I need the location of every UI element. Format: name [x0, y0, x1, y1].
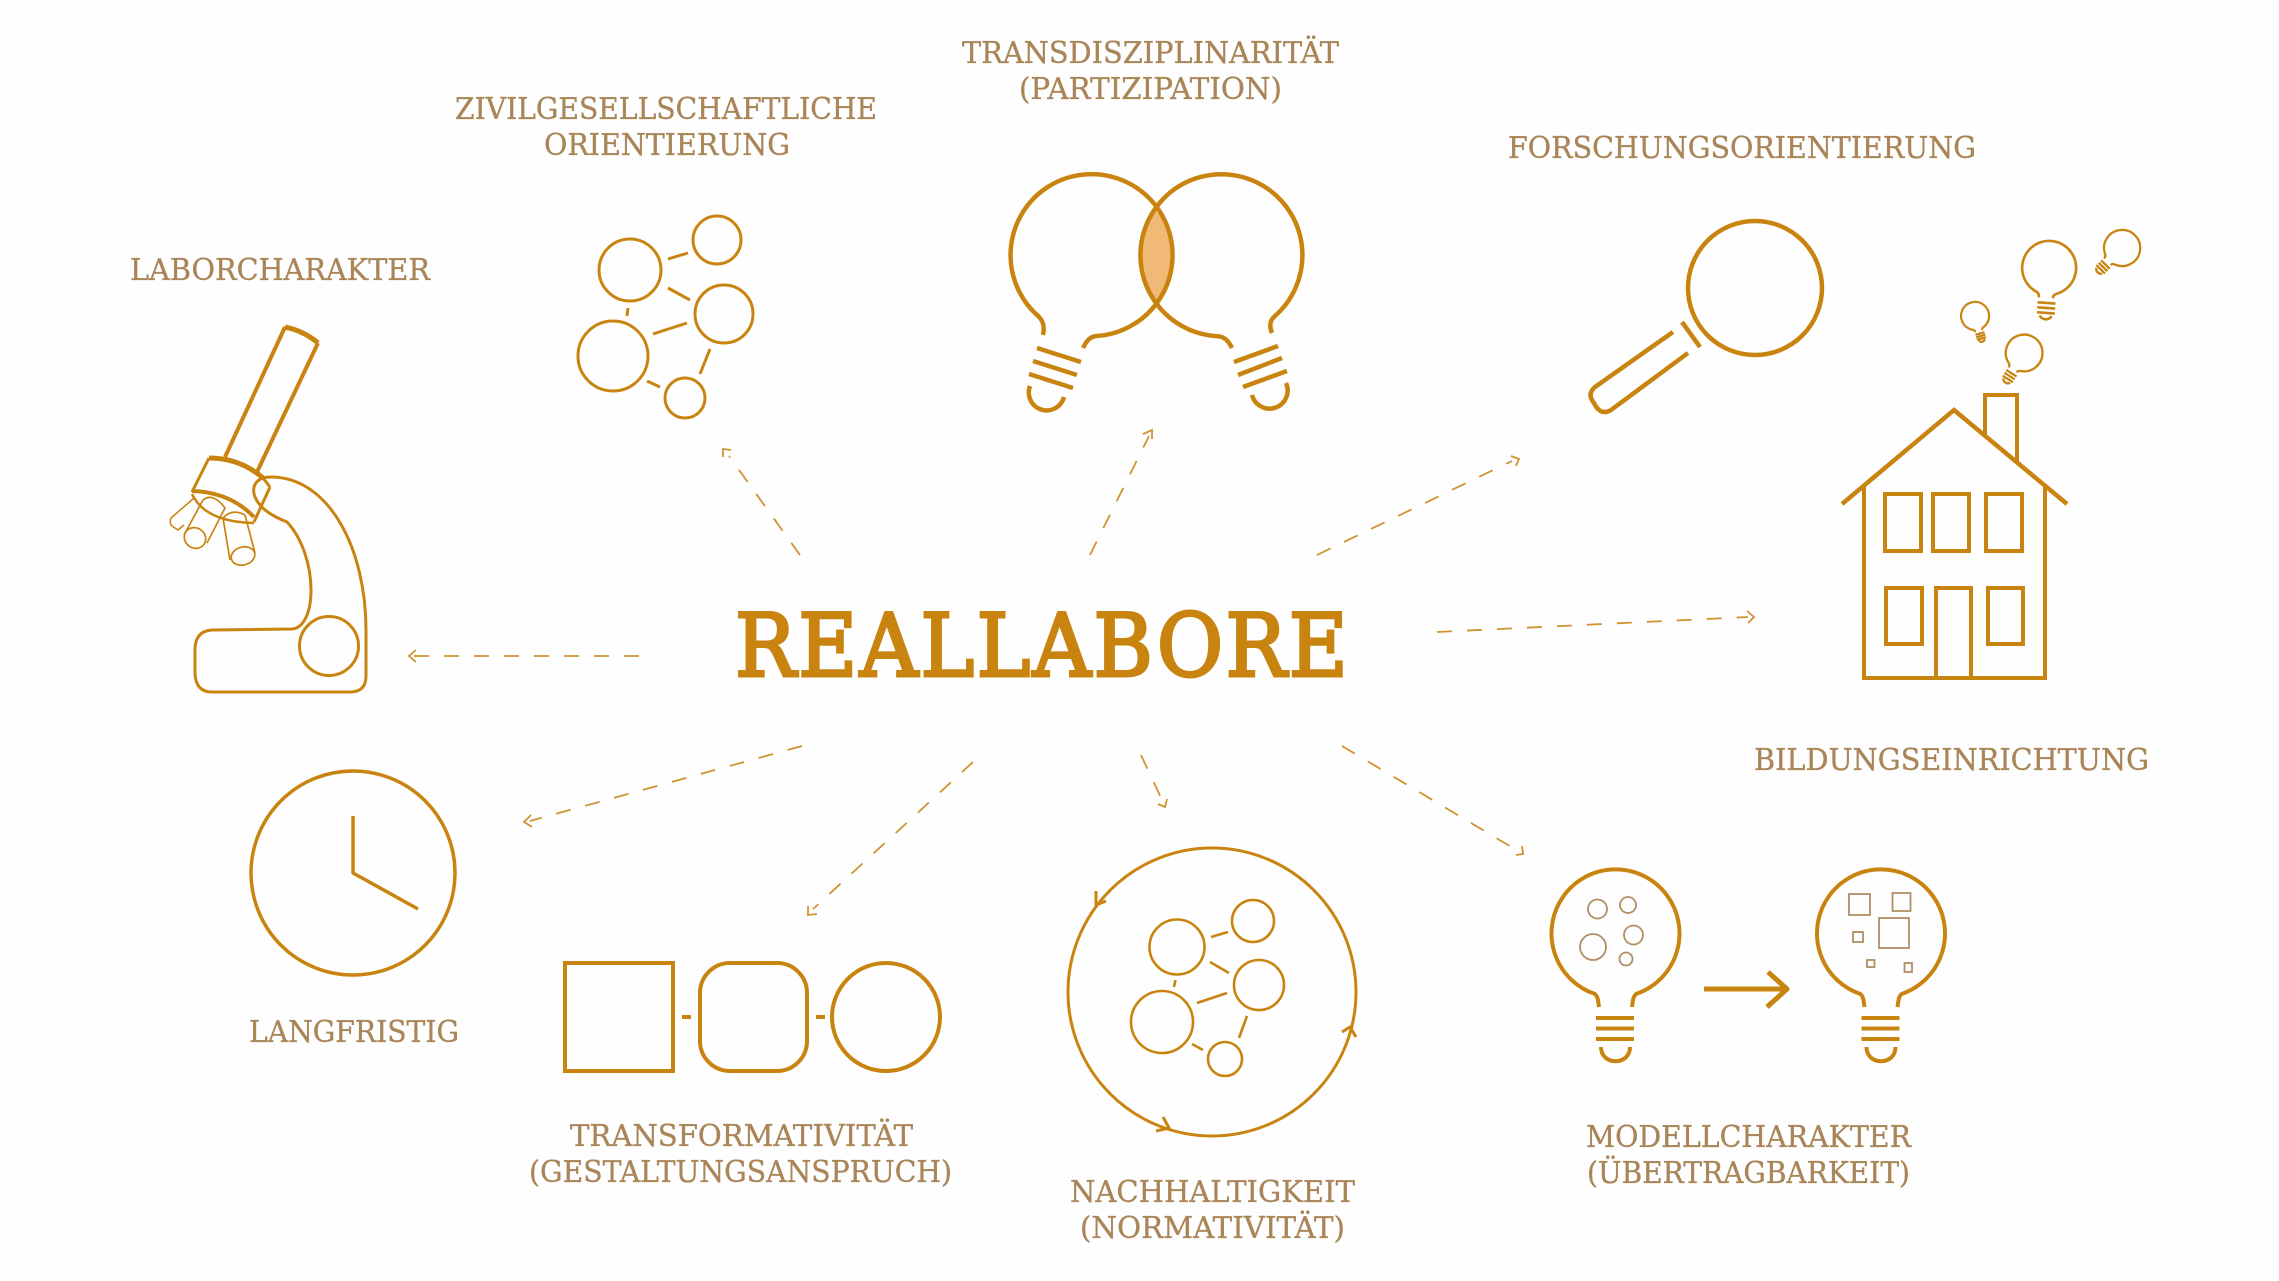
- label: Transformativität: [529, 1118, 952, 1190]
- arrow: to Laborcharakter: [409, 650, 639, 662]
- icon: magnifying glass: [1591, 221, 1822, 412]
- icon: idea bulbs from the chimney: [1958, 222, 2148, 392]
- title: REALLABORE: [735, 595, 1348, 697]
- label: Transdisziplinarität: [962, 35, 1339, 107]
- label: Zivilgesellschaftliche Orientierung: ZIVILGESELLSCHAFTLICHE: [455, 92, 877, 127]
- arrow: to Forschungsorientierung: [1317, 456, 1519, 555]
- label: Modellcharakter: MODELLCHARAKTER: [1586, 1120, 1912, 1155]
- label: Nachhaltigkeit: (NORMATIVITÄT): [1080, 1210, 1345, 1246]
- label: Nachhaltigkeit: NACHHALTIGKEIT: [1070, 1175, 1355, 1210]
- label: Transdisziplinarität: (PARTIZIPATION): [1019, 72, 1282, 107]
- label: Laborcharakter: LABORCHARAKTER: [130, 253, 431, 288]
- icon: microscope: [170, 327, 366, 692]
- arrow: model transfer: [1704, 972, 1787, 1007]
- arrow: to Transformativität: [808, 762, 973, 915]
- icon: overlapping light bulbs: [1011, 174, 1302, 410]
- label: Modellcharakter: [1586, 1120, 1912, 1191]
- label: Nachhaltigkeit: [1070, 1175, 1355, 1246]
- icon: house: [1842, 395, 2067, 678]
- icon: model bulb with squares: [1817, 869, 1945, 1061]
- icon: square to circle transformation: [565, 963, 940, 1071]
- label: Transformativität: TRANSFORMATIVITÄT: [570, 1118, 913, 1154]
- label: Forschungsorientierung: FORSCHUNGSORIENTIERUNG: [1508, 131, 1976, 166]
- label: Zivilgesellschaftliche Orientierung: [455, 92, 877, 163]
- arrow: to Zivilgesellschaftliche Orientierung: [723, 449, 800, 555]
- icon: clock: [251, 771, 455, 975]
- label: Transdisziplinarität: TRANSDISZIPLINARITÄT: [962, 35, 1339, 71]
- icon: model bulb with circles: [1551, 869, 1680, 1061]
- label: Modellcharakter: (ÜBERTRAGBARKEIT): [1587, 1155, 1910, 1191]
- label: Transformativität: (GESTALTUNGSANSPRUCH): [529, 1155, 952, 1190]
- label: Zivilgesellschaftliche Orientierung: ORIENTIERUNG: [544, 128, 790, 163]
- arrow: to Transdisziplinarität: [1090, 430, 1152, 555]
- label: Langfristig: LANGFRISTIG: [249, 1015, 459, 1050]
- icon: network in a cycle: [1068, 848, 1356, 1136]
- arrow: to Langfristig: [524, 746, 802, 827]
- icon: network of circles: [578, 216, 753, 418]
- label: Bildungseinrichtung: BILDUNGSEINRICHTUNG: [1754, 743, 2149, 778]
- arrow: to Nachhaltigkeit: [1141, 755, 1167, 807]
- arrow: to Bildungseinrichtung: [1437, 611, 1754, 632]
- arrow: to Modellcharakter: [1342, 746, 1523, 855]
